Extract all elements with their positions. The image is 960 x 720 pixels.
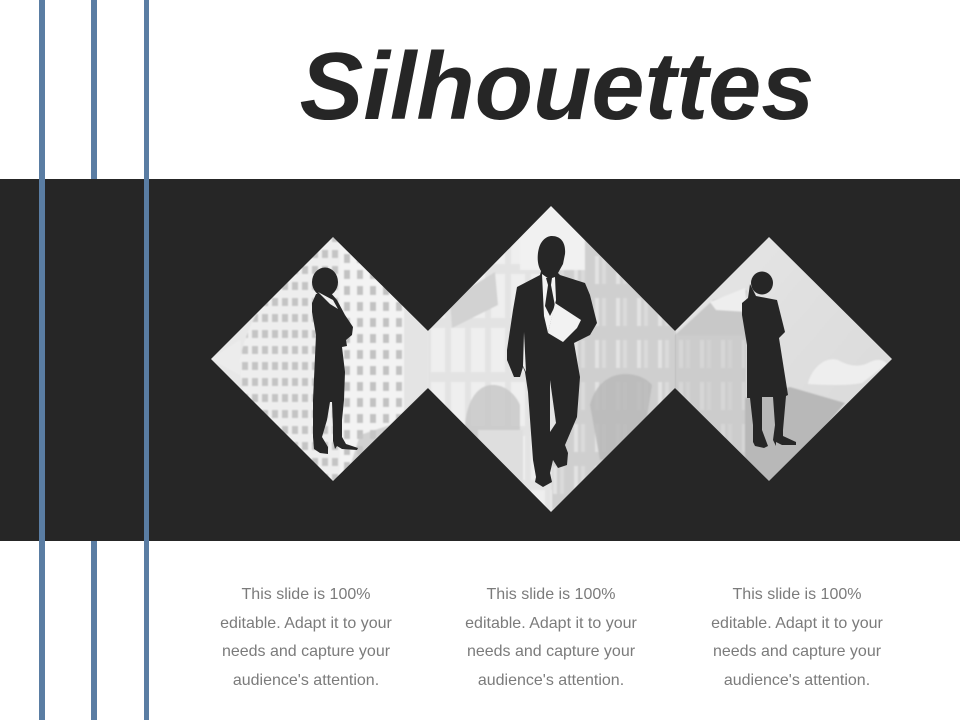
photo: round tower bbox=[205, 230, 430, 485]
text block: left: needs and capture your bbox=[222, 643, 390, 660]
text block: center: editable. Adapt it to your bbox=[465, 615, 637, 632]
silhouette: man with folder bbox=[507, 236, 597, 487]
text block: right: editable. Adapt it to your bbox=[711, 615, 883, 632]
photo: central building bbox=[428, 205, 676, 515]
text block: center bbox=[465, 586, 637, 689]
text block: right: needs and capture your bbox=[713, 643, 881, 660]
photo: sky and low building bbox=[675, 230, 895, 485]
silhouette: woman left bbox=[312, 268, 358, 454]
text block: right bbox=[711, 586, 883, 689]
text block: center: needs and capture your bbox=[467, 643, 635, 660]
dark band bbox=[0, 179, 960, 541]
text block: center: This slide is 100% bbox=[487, 586, 615, 603]
silhouette: woman right bbox=[742, 272, 796, 448]
text block: left: editable. Adapt it to your bbox=[220, 615, 392, 632]
text block: left: audience's attention. bbox=[233, 672, 379, 689]
text block: right: audience's attention. bbox=[724, 672, 870, 689]
left blue stripe bbox=[39, 0, 45, 720]
diamond photo collage bbox=[205, 205, 895, 515]
middle blue stripe bbox=[91, 0, 97, 720]
text block: left bbox=[220, 586, 392, 689]
text block: left: This slide is 100% bbox=[242, 586, 370, 603]
text block: right: This slide is 100% bbox=[733, 586, 861, 603]
right blue stripe bbox=[144, 0, 149, 720]
title: Silhouettes bbox=[300, 34, 814, 140]
text block: center: audience's attention. bbox=[478, 672, 624, 689]
